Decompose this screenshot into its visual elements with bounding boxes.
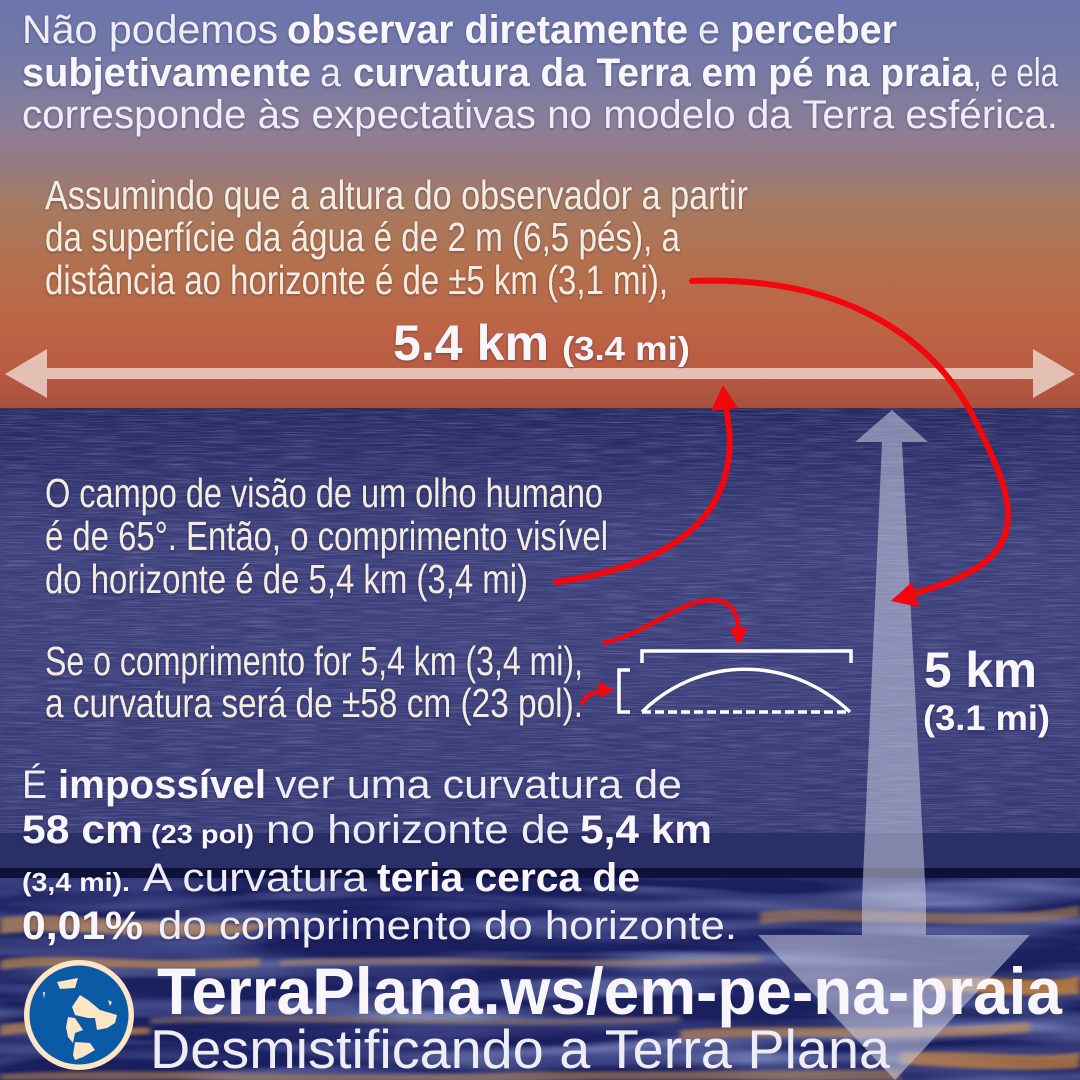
label: 5 km (923, 642, 1050, 738)
text block: field of view: é de 65°. Então, o comprimento visível (45, 513, 608, 559)
text block: impossible to see curvature: teria cerca de (377, 856, 640, 900)
heading text: subjetivamente (22, 51, 311, 95)
heading text: Não podemos (22, 8, 278, 52)
logo: flat earth map (24, 960, 134, 1070)
heading text: curvatura da Terra em pé na praia (353, 51, 974, 95)
text block: impossible to see curvature: do comprimento do horizonte. (158, 904, 737, 948)
heading text: observar diretamente (287, 8, 688, 52)
text block: observer height and distance to horizon: Assumindo que a altura do observador a partir (45, 172, 748, 218)
arrow: red, length to diagram bracket (604, 600, 748, 645)
text block: field of view: O campo de visão de um olho humano (45, 470, 603, 516)
background: sunset sky (0, 0, 1080, 478)
text block: impossible to see curvature: ver uma curvatura de (275, 763, 682, 807)
label: 5.4 km: (3.4 mi) (562, 330, 690, 367)
text block: impossible to see curvature: (3,4 mi). (22, 867, 130, 897)
text block: impossible to see curvature: É (22, 762, 47, 807)
arrow: 5.4 km horizontal horizon length (5, 349, 1075, 398)
background: sea with ripples (0, 408, 1080, 1080)
heading text: corresponde às expectativas no modelo da Terra esférica. (22, 93, 1058, 137)
text block: impossible to see curvature: no horizonte de (266, 808, 570, 852)
heading text: a (320, 51, 342, 95)
text block: impossible to see curvature: impossível (58, 763, 266, 807)
text block: observer height and distance to horizon: distância ao horizonte é de ±5 km (3,1 mi), (45, 257, 668, 303)
text block: curvature for the length: a curvatura será de ±58 cm (23 pol). (45, 680, 583, 726)
heading text: e (698, 8, 720, 52)
heading text (22, 8, 1059, 137)
footer: tagline: Desmistificando a Terra Plana (150, 1018, 890, 1080)
text block: observer height and distance to horizon (45, 172, 748, 303)
heading text: perceber (730, 8, 897, 52)
arrow: red, field of view to horizon (556, 385, 738, 582)
text block: impossible to see curvature: 5,4 km (580, 808, 712, 852)
text block: impossible to see curvature (22, 762, 737, 948)
text block: field of view: do horizonte é de 5,4 km (3,4 mi) (45, 556, 528, 602)
arrow: red, curvature to side bracket (582, 681, 614, 703)
label: 5 km: (3.1 mi) (923, 699, 1050, 738)
arrow: 5 km vertical distance to horizon (758, 410, 1030, 1080)
text block: impossible to see curvature: (23 pol) (151, 819, 254, 849)
arrow: red, distance text to vertical arrow (692, 281, 1008, 607)
text block: observer height and distance to horizon: da superfície da água é de 2 m (6,5 pés), a (45, 214, 680, 260)
text block: impossible to see curvature: 58 cm (22, 808, 143, 852)
label: 5 km: 5 km (924, 642, 1037, 698)
label: 5.4 km: 5.4 km (393, 315, 549, 371)
footer: site URL: TerraPlana.ws/em-pe-na-praia (157, 954, 1063, 1028)
text block: curvature for the length (45, 638, 583, 726)
text block: impossible to see curvature: 0,01% (22, 904, 143, 948)
text block: curvature for the length: Se o comprimento for 5,4 km (3,4 mi), (45, 638, 583, 684)
text block: impossible to see curvature: A curvatura (143, 856, 368, 900)
heading text: , e ela (973, 51, 1059, 95)
diagram: horizon curvature (619, 651, 851, 712)
label: 5.4 km (393, 315, 690, 371)
text block: field of view (45, 470, 608, 602)
